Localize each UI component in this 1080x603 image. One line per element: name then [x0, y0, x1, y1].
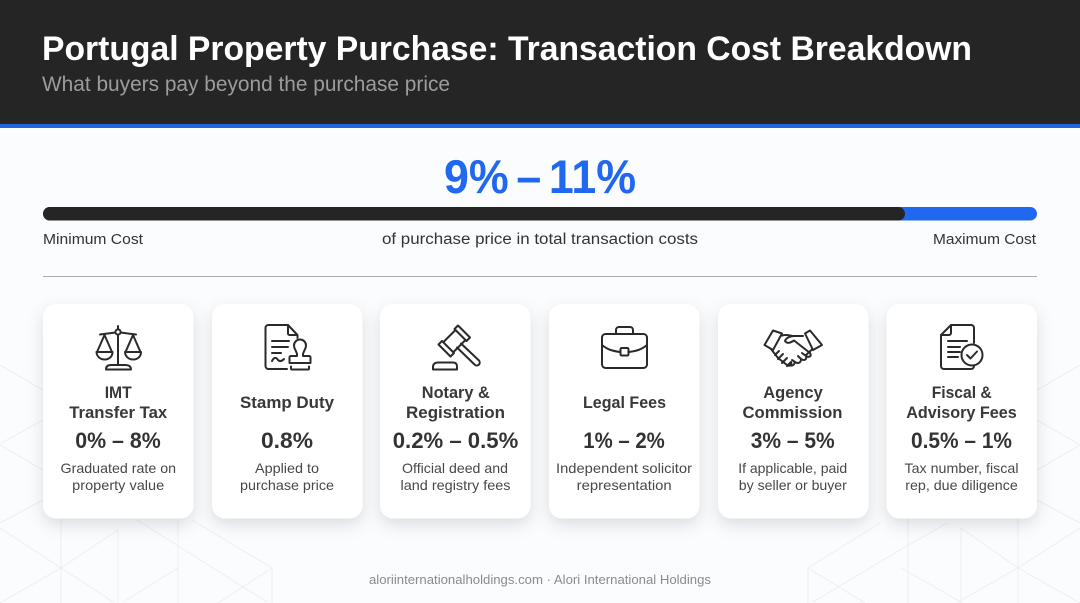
headline range: 9% – 11% [444, 150, 636, 203]
card title: Fiscal & [932, 383, 992, 402]
header band [0, 0, 1080, 128]
icon: handshake [764, 330, 822, 366]
icon: briefcase [602, 327, 647, 368]
panel: agency commission: Commission [742, 403, 842, 422]
panel: IMT transfer tax: property value [72, 477, 164, 493]
panel: fiscal and advisory fees: Advisory Fees [906, 403, 1017, 422]
card value: 0.8% [261, 428, 313, 453]
card value: 3% – 5% [751, 428, 835, 453]
panel: IMT transfer tax [43, 304, 194, 518]
maximum cost label: Maximum Cost [933, 231, 1037, 248]
card title: Legal Fees [583, 393, 666, 412]
card description: Independent solicitor [556, 460, 692, 476]
card description: Graduated rate on [61, 460, 176, 476]
footer: aloriinternationalholdings.com · Alori International Holdings [369, 572, 711, 587]
bar caption: of purchase price in total transaction costs [382, 231, 698, 248]
card description: Applied to [255, 460, 319, 476]
card description: If applicable, paid [738, 460, 847, 476]
panel: IMT transfer tax: Transfer Tax [69, 403, 168, 422]
card value: 1% – 2% [583, 428, 665, 453]
card description: Tax number, fiscal [904, 460, 1018, 476]
card value: 0.2% – 0.5% [393, 428, 518, 453]
title: Portugal Property Purchase: Transaction Cost Breakdown [42, 30, 972, 68]
panel: fiscal and advisory fees [886, 304, 1037, 518]
card value: 0% – 8% [75, 428, 161, 453]
card description: Official deed and [402, 460, 508, 476]
panel: stamp duty [212, 304, 362, 518]
card title: Notary & [422, 383, 490, 402]
panel: notary and registration [380, 304, 530, 518]
icon: stamped document [266, 325, 311, 370]
icon: checked document [941, 325, 982, 369]
card title: Stamp Duty [240, 393, 335, 412]
minimum cost label: Minimum Cost [43, 231, 144, 248]
panel: stamp duty: purchase price [240, 477, 334, 493]
panel: legal fees: representation [577, 477, 672, 493]
subtitle: What buyers pay beyond the purchase price [42, 73, 450, 96]
icon: gavel [433, 326, 480, 370]
card title: IMT [105, 383, 132, 402]
panel: agency commission: by seller or buyer [739, 477, 847, 493]
panel: notary and registration: land registry fees [400, 477, 510, 493]
panel: legal fees [549, 304, 700, 518]
panel: notary and registration: Registration [406, 403, 505, 422]
card value: 0.5% – 1% [911, 428, 1012, 453]
card title: Agency [763, 383, 823, 402]
panel: fiscal and advisory fees: rep, due diligence [905, 477, 1018, 493]
range bar [43, 207, 1037, 220]
icon: scales [96, 326, 141, 370]
panel: agency commission [718, 304, 868, 518]
